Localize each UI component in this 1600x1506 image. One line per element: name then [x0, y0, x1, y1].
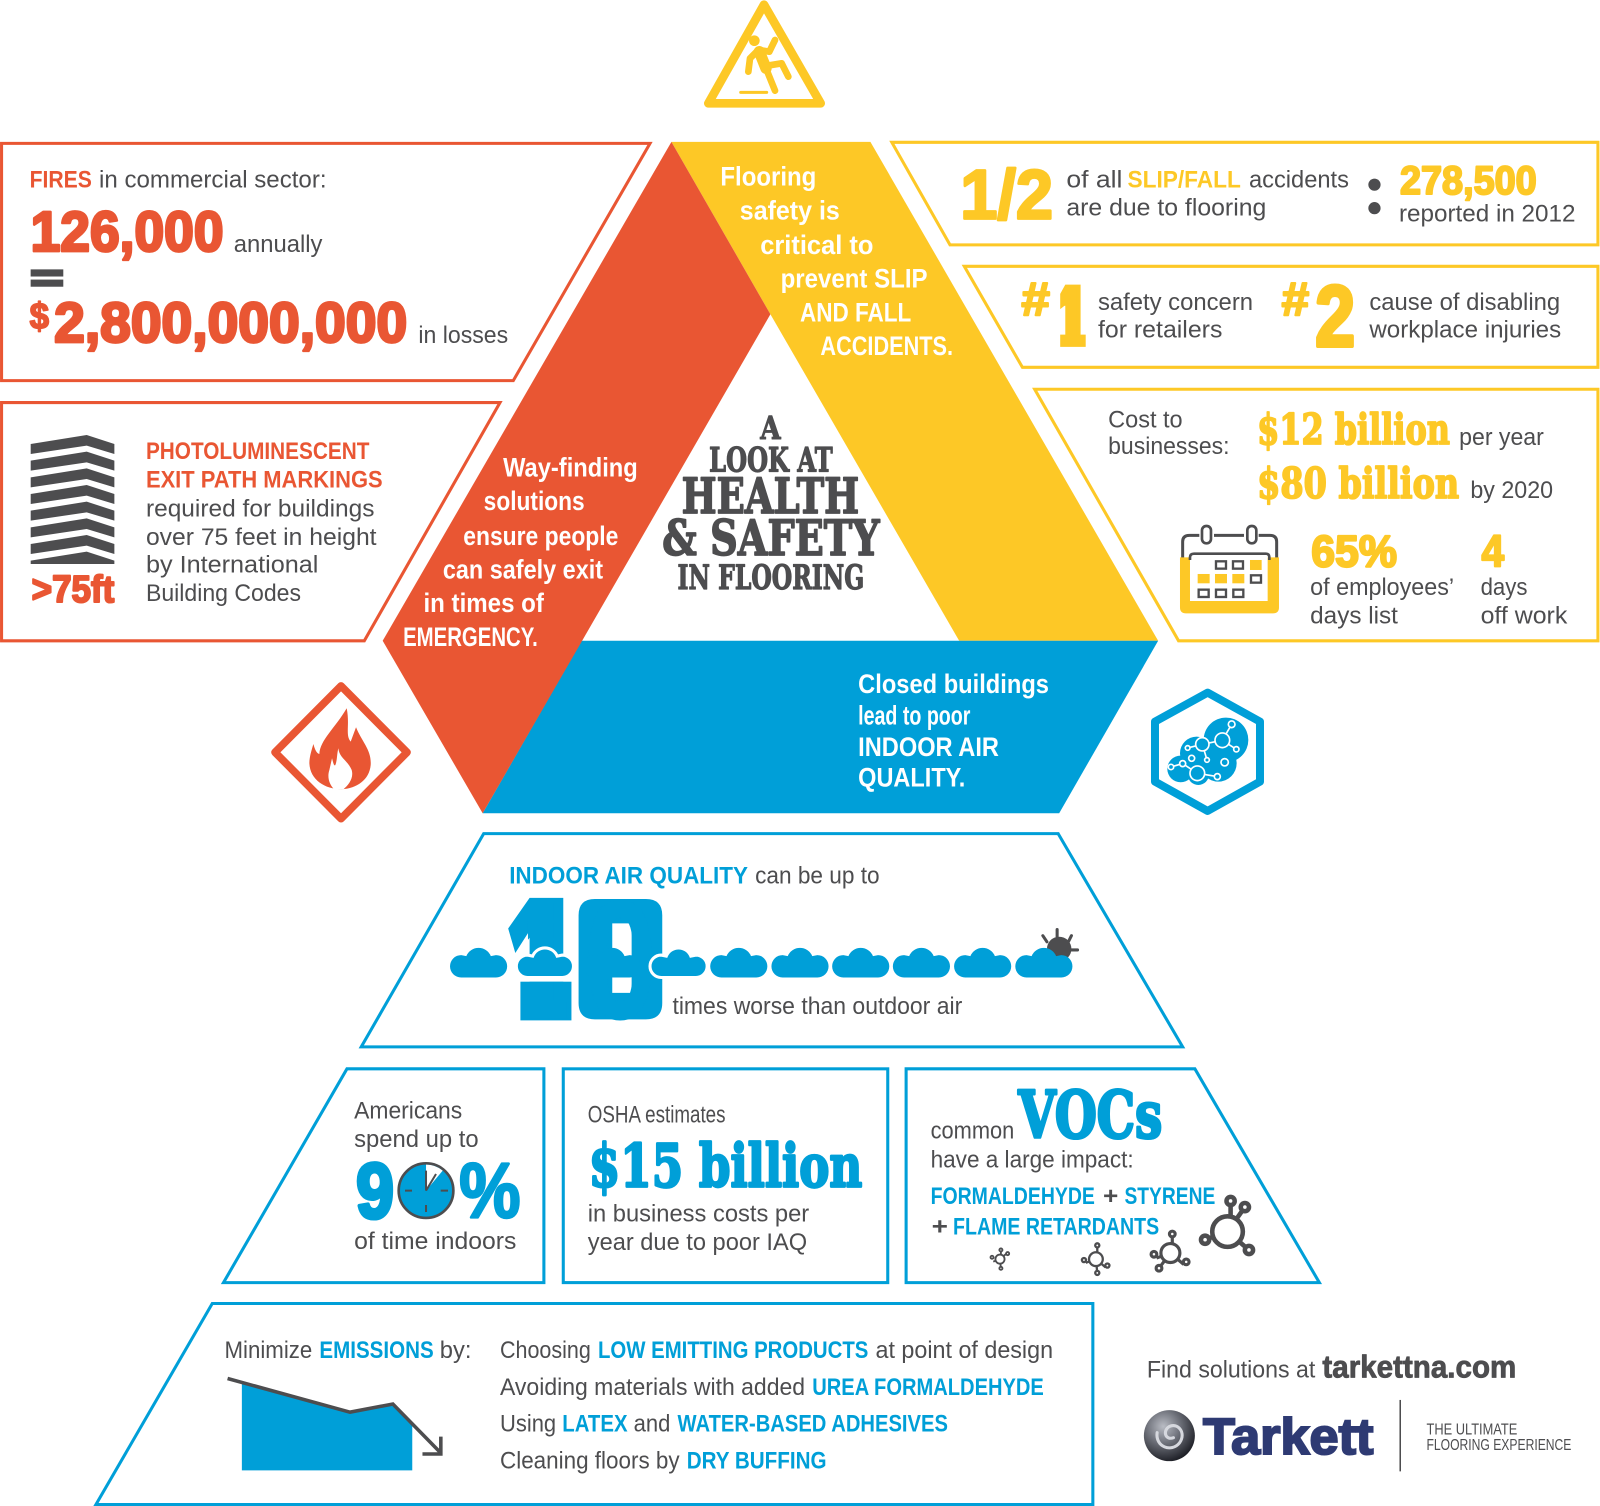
icon: row of ten clouds	[450, 948, 1072, 982]
stat: 2.8 billion in losses: 2,800,000,000	[54, 291, 407, 354]
stat: 126,000 annually: annually	[234, 231, 323, 258]
stat: 15 billion: $15 billion	[589, 1131, 862, 1201]
text: cost to businesses	[1108, 407, 1230, 460]
stat: 65 percent of employees: of employees’	[1310, 574, 1454, 601]
text: slip and fall accidents: SLIP/FALL	[1128, 167, 1241, 194]
icon: tall building	[31, 435, 114, 564]
text: list of VOCs: FORMALDEHYDE	[931, 1183, 1095, 1210]
stat: number 1 safety concern: for retailers	[1098, 317, 1222, 344]
stat: 65 percent of employees: 65%	[1311, 525, 1397, 576]
text: common VOCs heading: common	[931, 1118, 1014, 1145]
panel: common VOCs	[906, 1069, 1319, 1283]
text: common VOCs heading: have a large impact:	[931, 1146, 1134, 1173]
stat: 4 days off work: days	[1481, 574, 1528, 601]
stat: number 2 cause of injuries: 2	[1315, 268, 1355, 365]
text: way-finding solutions	[403, 453, 638, 652]
text: americans spend up to: Americans	[354, 1097, 462, 1124]
text: fires in commercial sector: FIRES	[30, 167, 92, 194]
stat: 65 percent of employees: days list	[1310, 602, 1398, 629]
stat: 278,500 reported	[1399, 159, 1575, 227]
stat: 90 percent with clock as zero: 9	[356, 1148, 394, 1234]
title	[662, 410, 880, 597]
stat: 4 days off work	[1481, 525, 1568, 629]
text: business costs due to poor IAQ: year due to poor IAQ	[588, 1229, 807, 1256]
stat: 65 percent of employees	[1310, 525, 1454, 629]
icon: calendar	[1180, 526, 1279, 613]
panel: cost to businesses	[1035, 389, 1598, 641]
text: slip and fall accidents: are due to flooring	[1066, 194, 1266, 221]
stat: number 1 safety concern: safety concern	[1098, 289, 1253, 316]
text: americans spend up to: spend up to	[354, 1126, 479, 1153]
text: slip and fall accidents: accidents	[1249, 167, 1349, 194]
title: IN FLOORING	[678, 557, 864, 597]
text: closed buildings: lead to poor	[858, 700, 970, 730]
stat: one half: 1/2	[960, 155, 1053, 233]
text: exit path markings requirement: Building Codes	[146, 580, 301, 607]
text: way-finding solutions: Way-finding	[503, 453, 638, 483]
icon: colon bullets	[1368, 179, 1381, 214]
text: exit path markings requirement	[146, 438, 383, 607]
text: choosing low emitting products: Choosing	[500, 1337, 591, 1364]
panel: minimize emissions	[96, 1304, 1093, 1505]
text: slip and fall accidents: of all	[1066, 167, 1122, 194]
text: exit path markings requirement: required for buildings	[146, 495, 375, 522]
stat: 10: 0	[584, 865, 657, 1054]
text: exit path markings requirement: PHOTOLUMINESCENT	[146, 438, 369, 465]
text: using latex and water-based adhesives: WATER-BASED ADHESIVES	[678, 1411, 948, 1438]
text: way-finding solutions: solutions	[484, 486, 585, 516]
stat: 12 billion per year: per year	[1459, 424, 1544, 451]
stat: 80 billion by 2020: $80 billion	[1257, 459, 1459, 508]
text: list of VOCs: +	[1103, 1183, 1118, 1210]
text: list of VOCs: FLAME RETARDANTS	[953, 1214, 1159, 1241]
stat: 4 days off work: 4	[1482, 525, 1504, 576]
stat: 126,000 annually: 126,000	[31, 200, 223, 263]
text: find solutions at tarkettna.com	[1147, 1348, 1516, 1384]
text: flooring safety: Flooring	[720, 162, 816, 192]
text: exit path markings requirement: over 75 feet in height	[146, 524, 377, 551]
stat: number 2 cause of injuries	[1282, 268, 1561, 365]
stat: 278,500 reported: 278,500	[1400, 159, 1537, 203]
icon: logo sphere	[1144, 1410, 1195, 1461]
text: way-finding solutions: can safely exit	[443, 555, 603, 585]
stat: 10	[508, 865, 662, 1054]
text: cleaning floors by dry buffing: Cleaning floors by	[500, 1447, 680, 1474]
text: flooring safety	[720, 162, 953, 361]
text: minimize emissions by	[225, 1337, 471, 1364]
text: choosing low emitting products	[500, 1337, 1053, 1364]
text: minimize emissions by: Minimize	[225, 1337, 312, 1364]
icon: slip and fall warning triangle	[708, 5, 821, 103]
stat: number 1 safety concern	[1021, 268, 1253, 365]
text: avoiding urea formaldehyde: Avoiding materials with added	[500, 1374, 805, 1401]
stat: 2.8 billion in losses: in losses	[418, 322, 508, 349]
text: list of VOCs	[931, 1183, 1215, 1241]
text: common VOCs heading: VOCs	[1018, 1079, 1162, 1154]
stat: 12 billion per year: $12 billion	[1257, 405, 1450, 454]
stat: 10: 1	[522, 865, 569, 1054]
text: list of VOCs: STYRENE	[1124, 1183, 1215, 1210]
text: americans spend up to	[354, 1097, 479, 1153]
text: way-finding solutions: in times of	[423, 588, 544, 618]
text: using latex and water-based adhesives	[500, 1411, 948, 1438]
stat: 2.8 billion in losses: $	[30, 296, 49, 337]
stat: 278,500 reported: reported in 2012	[1399, 200, 1575, 227]
text: exit path markings requirement: EXIT PATH MARKINGS	[146, 467, 383, 494]
text: avoiding urea formaldehyde: UREA FORMALDEHYDE	[812, 1374, 1044, 1401]
text: flooring safety: AND FALL	[800, 297, 911, 327]
text: cleaning floors by dry buffing: DRY BUFFING	[687, 1447, 827, 1474]
text: find solutions at tarkettna.com: Find solutions at	[1147, 1356, 1315, 1383]
equals sign	[31, 269, 63, 287]
text: slip and fall accidents	[1066, 167, 1349, 221]
panel: OSHA 15 billion estimate	[563, 1069, 888, 1283]
text: closed buildings: QUALITY.	[858, 763, 965, 793]
text: avoiding urea formaldehyde	[500, 1374, 1044, 1401]
text: business costs due to poor IAQ: in business costs per	[588, 1200, 809, 1227]
stat: number 1 safety concern: 1	[1062, 268, 1084, 365]
text: cost to businesses: businesses:	[1108, 433, 1230, 460]
stat: 4 days off work: off work	[1481, 602, 1568, 629]
text: way-finding solutions: ensure people	[463, 521, 618, 551]
panel: photoluminescent exit path markings	[2, 403, 500, 641]
stat: 126,000 annually	[31, 200, 323, 263]
text: flooring safety: critical to	[760, 230, 873, 260]
title: & SAFETY	[662, 509, 880, 567]
stat: 90 percent with clock as zero: %	[459, 1148, 520, 1234]
text: closed buildings: Closed buildings	[858, 669, 1049, 699]
text: closed buildings	[858, 669, 1049, 793]
text: exit path markings requirement: by International	[146, 551, 318, 578]
title: HEALTH	[682, 467, 859, 525]
label: over 75 feet: >75ft	[32, 568, 115, 610]
text: flooring safety: safety is	[740, 195, 840, 225]
stat: 90 percent with clock as zero	[356, 1148, 520, 1234]
logo: Tarkett	[1144, 1400, 1571, 1471]
text: times worse than outdoor air: times worse than outdoor air	[672, 993, 962, 1020]
text: using latex and water-based adhesives: Using	[500, 1411, 556, 1438]
stat: 80 billion by 2020: by 2020	[1470, 477, 1553, 504]
text: business costs due to poor IAQ	[588, 1200, 809, 1256]
logo: Tarkett: THE ULTIMATE	[1427, 1422, 1517, 1439]
text: flooring safety: ACCIDENTS.	[820, 331, 953, 361]
text: minimize emissions by: by:	[440, 1337, 471, 1364]
stat: number 2 cause of injuries: workplace injuries	[1368, 317, 1561, 344]
panel: half of slip and fall accidents	[892, 142, 1598, 245]
icon: fire diamond	[275, 686, 407, 819]
text: common VOCs heading	[931, 1079, 1162, 1173]
title: A	[759, 410, 781, 447]
text: cost to businesses: Cost to	[1108, 407, 1183, 434]
text: cleaning floors by dry buffing	[500, 1447, 827, 1474]
panel: indoor air quality ten times worse	[361, 834, 1183, 1054]
text: choosing low emitting products: at point of design	[876, 1337, 1053, 1364]
text: minimize emissions by: EMISSIONS	[319, 1337, 434, 1364]
text: find solutions at tarkettna.com: tarkettna.com	[1322, 1348, 1516, 1384]
icon: sun behind cloud	[1043, 930, 1078, 961]
text: indoor air quality: INDOOR AIR QUALITY	[509, 863, 748, 890]
stat: number 2 cause of injuries: #	[1282, 273, 1309, 325]
logo: Tarkett: Tarkett	[1203, 1408, 1373, 1465]
icon: molecules	[991, 1197, 1253, 1275]
text: OSHA estimates: OSHA estimates	[588, 1101, 726, 1128]
panel: 90 percent of time indoors	[223, 1069, 544, 1283]
stat: number 1 safety concern: #	[1021, 273, 1050, 325]
icon: clock	[399, 1163, 453, 1218]
stat: number 2 cause of injuries: cause of disabling	[1369, 289, 1560, 316]
triangle segment: orange way-finding	[383, 142, 770, 813]
panel: number one and number two rankings	[964, 266, 1598, 367]
triangle segment: yellow slip and fall	[671, 142, 1158, 641]
panel: fires statistics	[2, 143, 650, 381]
chart: declining emissions	[228, 1379, 441, 1470]
text: flooring safety: prevent SLIP	[781, 264, 928, 294]
text: fires in commercial sector: in commercial sector:	[99, 167, 327, 194]
text: of time indoors: of time indoors	[354, 1228, 516, 1255]
text: using latex and water-based adhesives: and	[634, 1411, 670, 1438]
title: LOOK AT	[709, 439, 833, 479]
icon: hexagon with molecule cloud	[1155, 693, 1260, 811]
text: indoor air quality: can be up to	[755, 863, 880, 890]
text: closed buildings: INDOOR AIR	[858, 732, 999, 762]
text: list of VOCs: +	[932, 1214, 948, 1241]
text: choosing low emitting products: LOW EMITTING PRODUCTS	[598, 1337, 868, 1364]
text: way-finding solutions: EMERGENCY.	[403, 622, 538, 652]
text: using latex and water-based adhesives: LATEX	[562, 1411, 628, 1438]
triangle segment: blue indoor air quality	[483, 641, 1158, 813]
